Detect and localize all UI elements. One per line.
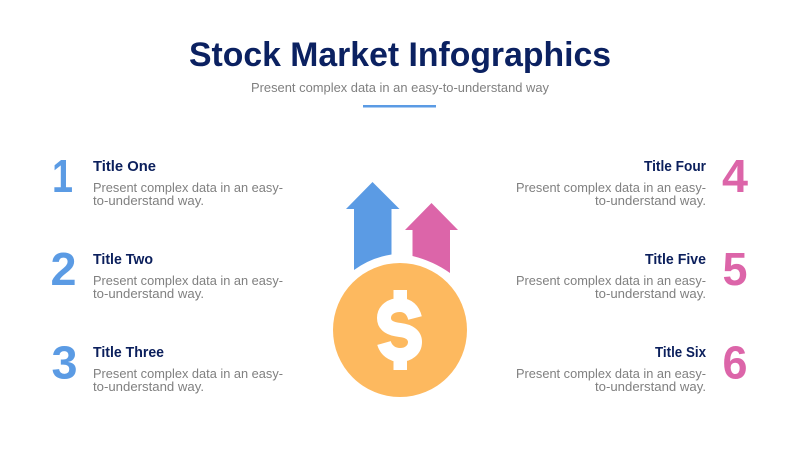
description: title three: Present complex data in an easy- xyxy=(93,367,283,381)
number 6: 6 xyxy=(722,336,748,388)
description: title one: to-understand way. xyxy=(93,194,204,208)
description: title six: to-understand way. xyxy=(595,380,706,394)
number 3: 3 xyxy=(52,336,78,388)
number 2: 2 xyxy=(50,243,76,295)
description: title two: to-understand way. xyxy=(93,287,204,301)
item 2 xyxy=(50,243,283,301)
icon: dollar sign xyxy=(384,290,415,370)
icon: orange coin xyxy=(333,263,467,397)
heading: title three: Title Three xyxy=(93,344,164,361)
item 3 xyxy=(52,336,283,394)
title: Stock Market Infographics xyxy=(189,36,611,74)
description: title four: Present complex data in an easy- xyxy=(516,181,706,195)
icon: blue arrow xyxy=(346,182,400,270)
item 6 xyxy=(516,336,748,394)
central icon: coin with rising arrows xyxy=(333,182,467,397)
description: title one: Present complex data in an easy- xyxy=(93,181,283,195)
number 5: 5 xyxy=(722,243,748,295)
description: title four: to-understand way. xyxy=(595,194,706,208)
subtitle: Present complex data in an easy-to-understand way xyxy=(251,80,549,95)
item 1 xyxy=(52,150,283,208)
description: title three: to-understand way. xyxy=(93,380,204,394)
title underline xyxy=(363,105,436,108)
heading: title one: Title One xyxy=(93,158,156,175)
item 5 xyxy=(516,243,748,301)
number 1: 1 xyxy=(52,150,73,202)
heading: title five: Title Five xyxy=(645,251,706,268)
heading: title six: Title Six xyxy=(655,344,707,361)
heading: title two: Title Two xyxy=(93,251,153,268)
description: title five: to-understand way. xyxy=(595,287,706,301)
item 4 xyxy=(516,150,748,208)
description: title six: Present complex data in an easy- xyxy=(516,367,706,381)
heading: title four: Title Four xyxy=(644,158,706,175)
description: title five: Present complex data in an easy- xyxy=(516,274,706,288)
description: title two: Present complex data in an easy- xyxy=(93,274,283,288)
number 4: 4 xyxy=(722,150,748,202)
icon: pink arrow xyxy=(405,203,458,273)
